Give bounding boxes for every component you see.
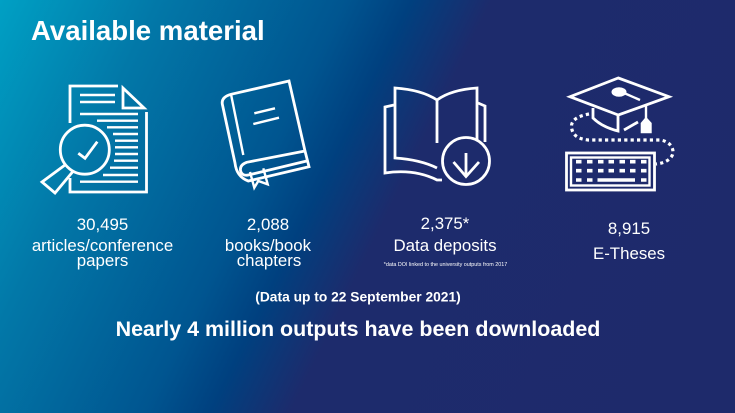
stat: data deposits: *data DOI linked to the university outputs from 2017 (384, 262, 507, 268)
downloads headline: Nearly 4 million outputs have been downloaded (116, 317, 600, 341)
stat: books/book chapters: chapters (237, 251, 301, 270)
stat: e-theses (593, 219, 665, 263)
stat: articles/conference papers: papers (77, 251, 128, 270)
title: Available material (31, 15, 265, 46)
icon: open book with download arrow (385, 88, 490, 184)
stat: books/book chapters: books/book (225, 236, 312, 255)
stat: e-theses: 8,915 (608, 219, 650, 238)
icon: book with bookmark (222, 81, 309, 188)
stat: data deposits: 2,375* (421, 214, 470, 233)
stat: books/book chapters (225, 215, 312, 270)
stat: books/book chapters: 2,088 (247, 215, 289, 234)
icon: graduation cap and keyboard (566, 78, 673, 190)
stat: data deposits (384, 214, 507, 268)
stat: e-theses: E-Theses (593, 244, 665, 263)
data date note: (Data up to 22 September 2021) (255, 290, 461, 304)
stat: articles/conference papers: articles/conference (32, 236, 173, 255)
icon: document with magnifying glass (42, 86, 146, 193)
stat: articles/conference papers (32, 215, 173, 270)
stat: data deposits: Data deposits (394, 236, 496, 255)
stat: articles/conference papers: 30,495 (77, 215, 128, 234)
